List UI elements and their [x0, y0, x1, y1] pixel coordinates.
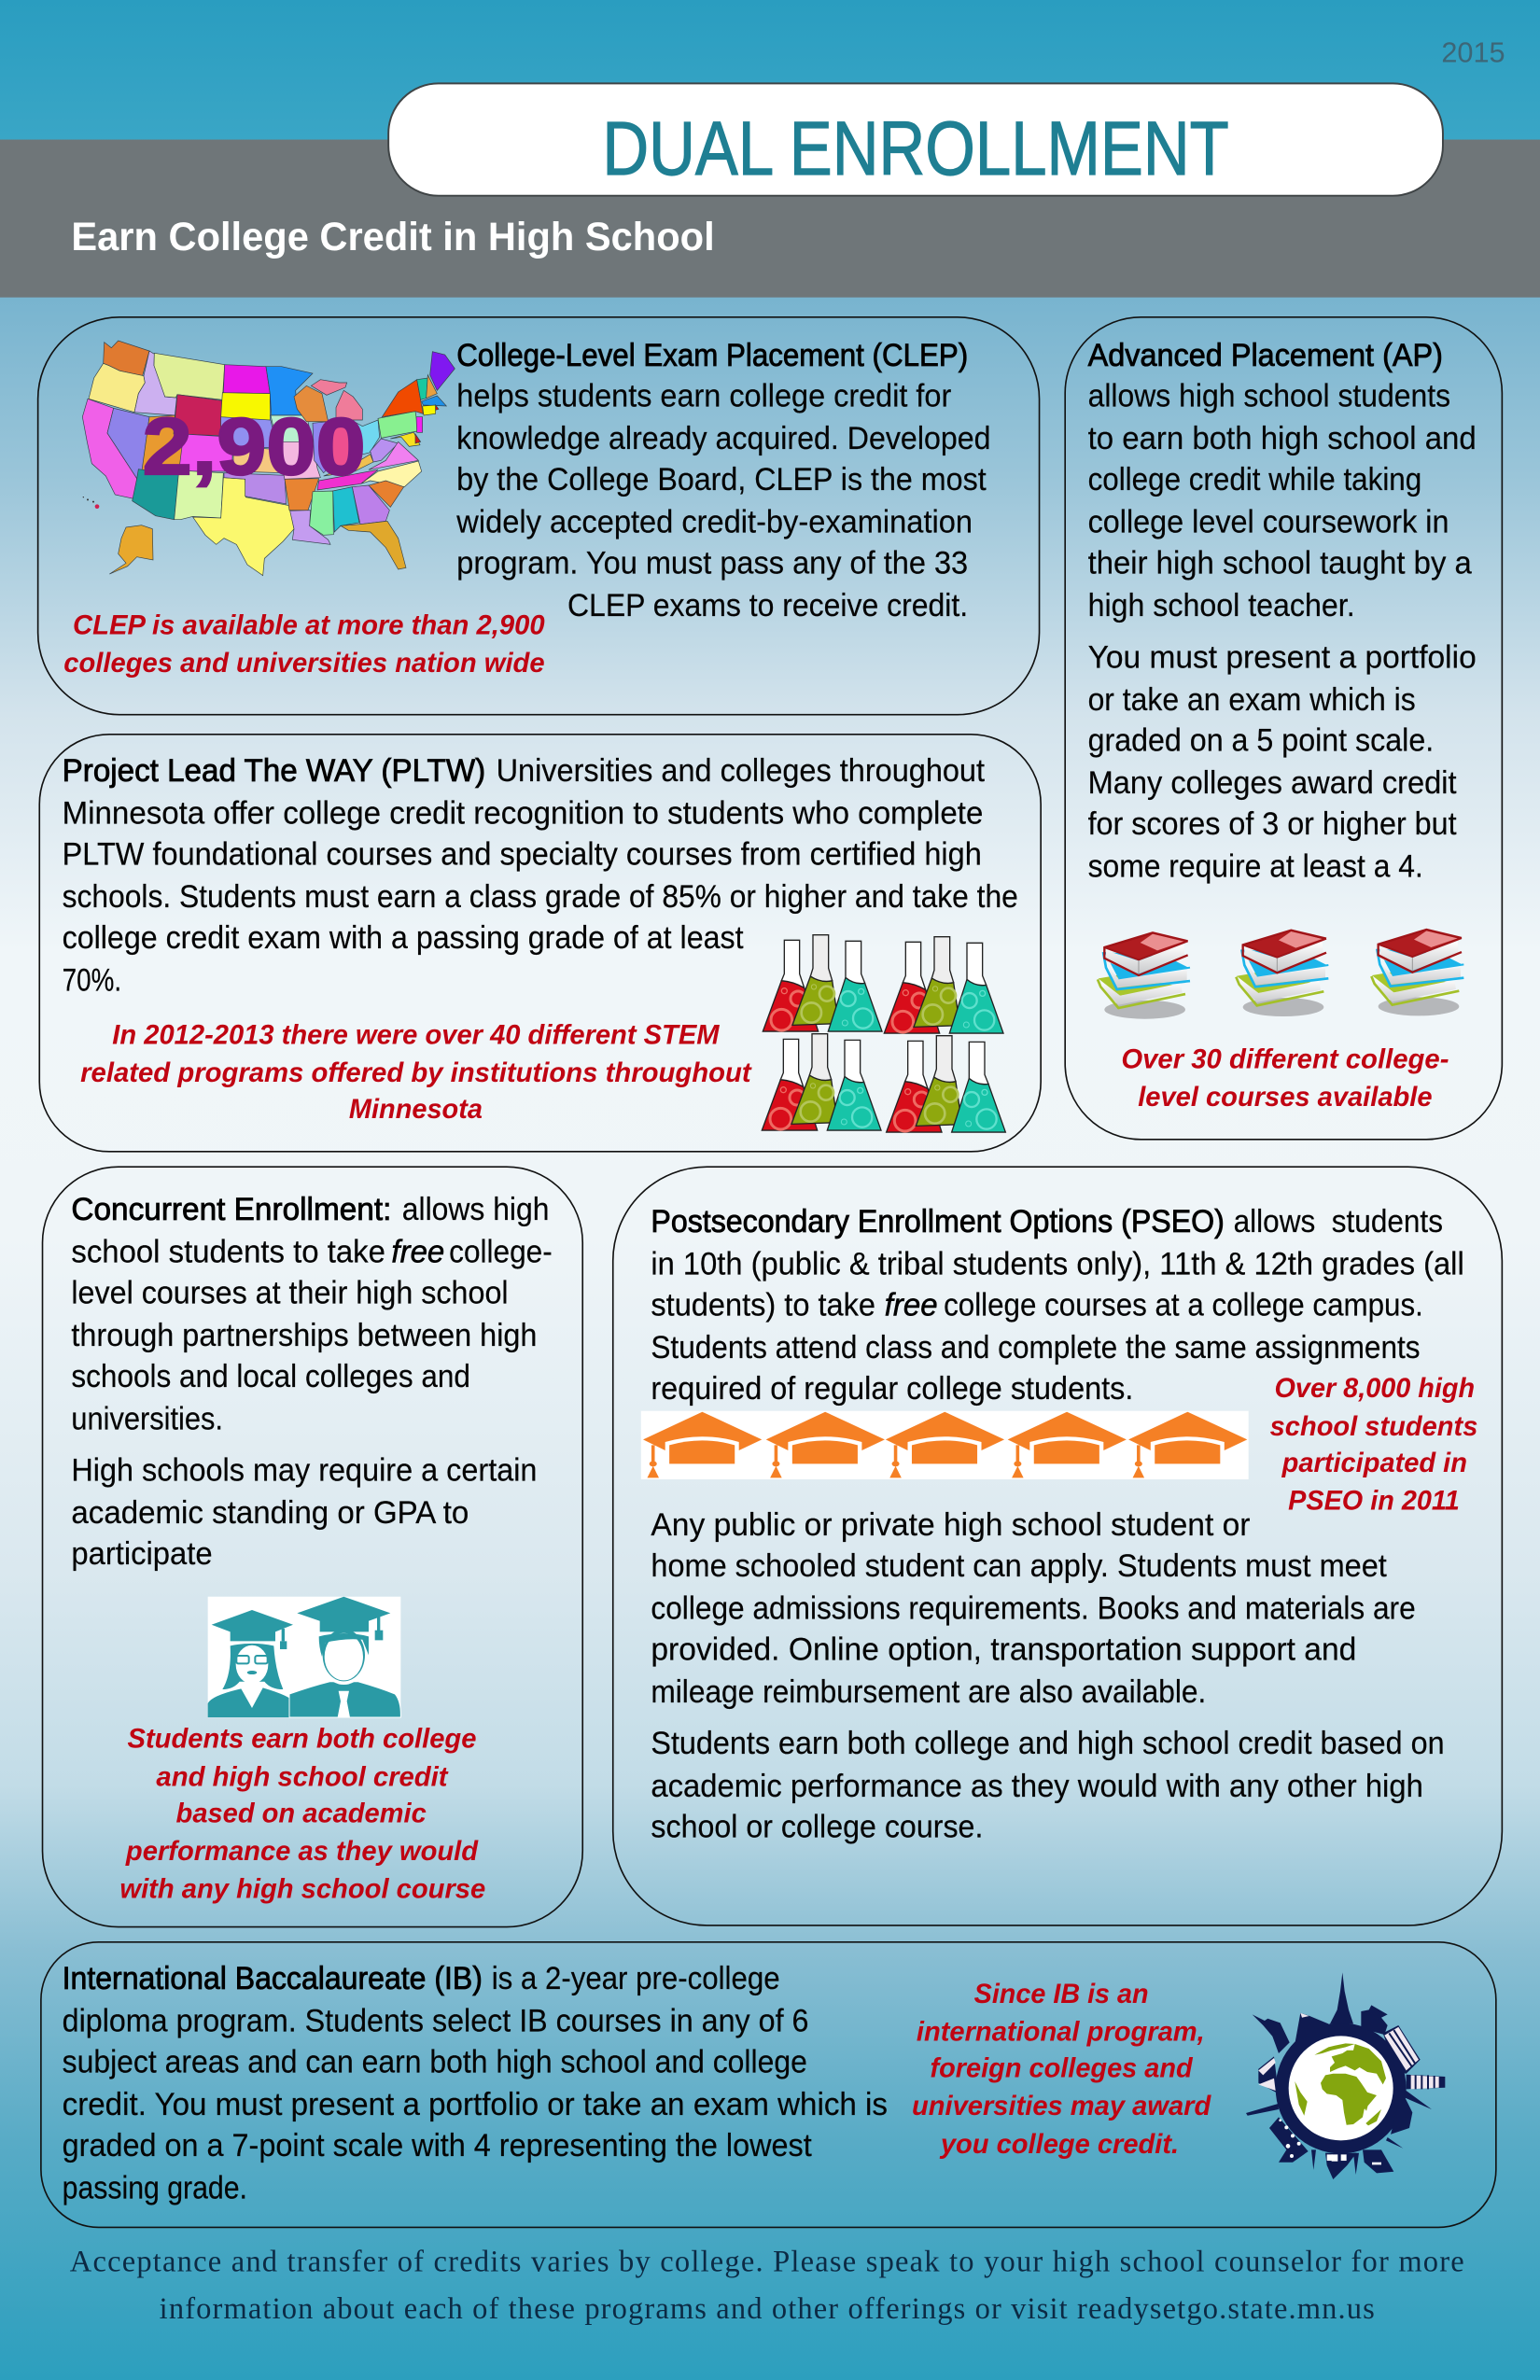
Concurrent text: High schools may require a certain: [71, 1453, 537, 1489]
Concurrent text: level courses at their high school: [71, 1275, 509, 1310]
icon: globe with landmarks: [1246, 1972, 1445, 2179]
year label: 2015: [1441, 36, 1505, 69]
header band: [0, 140, 1540, 298]
Concurrent callout: with any high school course: [119, 1875, 485, 1905]
icon: two graduates: [208, 1597, 400, 1717]
AP text: allows high school students: [1088, 379, 1450, 414]
PSEO details text: Any public or private high school student or: [651, 1507, 1251, 1543]
IB callout: international program,: [917, 2018, 1205, 2048]
IB text: credit. You must present a portfolio or take an exam which is: [63, 2087, 888, 2122]
PLTW callout: related programs offered by institutions throughout: [80, 1058, 752, 1088]
PLTW callout: [80, 1020, 752, 1125]
Concurrent text: academic standing or GPA to: [71, 1495, 469, 1531]
PLTW text: Minnesota offer college credit recognition to students who complete: [63, 796, 983, 832]
CLEP callout: [63, 611, 545, 679]
PSEO details text: school or college course.: [651, 1810, 983, 1845]
CLEP text: widely accepted credit-by-examination: [455, 505, 973, 540]
IB text: diploma program. Students select IB courses in any of 6: [63, 2004, 808, 2039]
PLTW callout: Minnesota: [349, 1095, 483, 1125]
big number 2,900: 2,900: [143, 402, 366, 492]
IB callout: universities may award: [912, 2092, 1211, 2121]
CLEP text: helps students earn college credit for: [456, 379, 951, 414]
AP text: [1088, 338, 1477, 885]
Concurrent text: [71, 1192, 553, 1572]
PSEO callout: Over 8,000 high: [1275, 1374, 1475, 1404]
Concurrent callout: Students earn both college: [128, 1725, 476, 1755]
IB text: graded on a 7-point scale with 4 representing the lowest: [63, 2128, 812, 2163]
AP text: some require at least a 4.: [1088, 849, 1423, 885]
AP callout: level courses available: [1138, 1083, 1433, 1113]
PLTW text: schools. Students must earn a class grade of 85% or higher and take the: [63, 879, 1018, 915]
Concurrent text: college-: [449, 1235, 553, 1270]
PSEO callout: PSEO in 2011: [1288, 1487, 1460, 1517]
PSEO details text: home schooled student can apply. Students must meet: [651, 1548, 1387, 1584]
IB callout: Since IB is an: [974, 1980, 1149, 2009]
footer note: information about each of these programs and other offerings or visit readysetgo.state.mn.us: [160, 2292, 1375, 2326]
AP text: college level coursework in: [1088, 505, 1449, 540]
Concurrent text: schools and local colleges and: [71, 1359, 470, 1394]
CLEP text: [455, 338, 991, 623]
PLTW callout: In 2012-2013 there were over 40 different STEM: [112, 1020, 720, 1050]
PSEO intro text: [651, 1204, 1464, 1407]
panel: PSEO: [613, 1167, 1502, 1925]
Concurrent text: through partnerships between high: [71, 1318, 537, 1353]
PSEO intro text: college courses at a college campus.: [944, 1287, 1423, 1323]
IB text: [63, 1961, 888, 2206]
PLTW text: 70%.: [63, 963, 121, 999]
AP text: college credit while taking: [1088, 462, 1421, 497]
PSEO details text: mileage reimbursement are also available.: [651, 1674, 1206, 1710]
AP text: Many colleges award credit: [1088, 765, 1457, 801]
Concurrent callout: [119, 1725, 485, 1905]
title: DUAL ENROLLMENT: [602, 106, 1229, 191]
PSEO details text: [651, 1507, 1445, 1845]
PLTW text: [63, 753, 1018, 999]
PLTW text: college credit exam with a passing grade of at least: [63, 920, 744, 956]
Concurrent callout: and high school credit: [156, 1762, 449, 1792]
PSEO intro text: required of regular college students.: [651, 1371, 1133, 1407]
Concurrent text: free: [391, 1235, 444, 1270]
IB callout: foreign colleges and: [931, 2054, 1194, 2084]
CLEP text: program. You must pass any of the 33: [456, 545, 968, 581]
PSEO intro text: Postsecondary Enrollment Options (PSEO): [651, 1204, 1225, 1239]
icon: row of graduation caps: [641, 1411, 1249, 1479]
panel: CLEP: [38, 317, 1040, 715]
AP text: to earn both high school and: [1088, 421, 1477, 456]
PSEO intro text: students) to take: [651, 1287, 875, 1323]
PLTW text: Project Lead The WAY (PLTW): [63, 753, 485, 789]
PSEO callout: school students: [1270, 1412, 1477, 1442]
Concurrent text: Concurrent Enrollment:: [71, 1192, 391, 1227]
icon: US map with 2,900: [82, 341, 455, 576]
IB text: is a 2-year pre-college: [492, 1961, 780, 1996]
AP text: high school teacher.: [1088, 588, 1355, 623]
AP callout: [1121, 1044, 1449, 1113]
AP text: for scores of 3 or higher but: [1088, 806, 1457, 842]
AP callout: Over 30 different college-: [1121, 1044, 1449, 1074]
subtitle: Earn College Credit in High School: [71, 215, 715, 259]
footer note: Acceptance and transfer of credits varies by college. Please speak to your high school counselor for more: [70, 2246, 1464, 2279]
Concurrent callout: performance as they would: [125, 1837, 479, 1867]
AP text: their high school taught by a: [1088, 545, 1472, 581]
Concurrent callout: based on academic: [176, 1799, 427, 1828]
IB callout: [912, 1980, 1211, 2160]
footer note: [70, 2246, 1464, 2326]
AP text: Advanced Placement (AP): [1088, 338, 1443, 373]
AP text: You must present a portfolio: [1088, 639, 1477, 675]
AP text: graded on a 5 point scale.: [1088, 723, 1434, 759]
PSEO callout: participated in: [1281, 1449, 1467, 1478]
PSEO details text: academic performance as they would with any other high: [651, 1769, 1423, 1804]
PSEO intro text: allows students: [1234, 1204, 1443, 1239]
panel: IB: [41, 1942, 1496, 2227]
Concurrent text: universities.: [71, 1401, 223, 1436]
panel: PLTW: [39, 735, 1041, 1152]
PSEO details text: Students earn both college and high school credit based on: [651, 1726, 1445, 1761]
CLEP text: knowledge already acquired. Developed: [456, 421, 991, 456]
CLEP text: CLEP exams to receive credit.: [567, 588, 968, 623]
IB text: passing grade.: [63, 2171, 247, 2206]
CLEP callout: CLEP is available at more than 2,900: [73, 611, 545, 641]
PLTW text: Universities and colleges throughout: [497, 753, 986, 789]
icon: chemistry flasks: [762, 935, 1005, 1132]
PSEO details text: college admissions requirements. Books and materials are: [651, 1591, 1416, 1627]
IB text: International Baccalaureate (IB): [63, 1961, 483, 1996]
title pill: [388, 83, 1443, 196]
PSEO intro text: free: [885, 1287, 938, 1323]
Concurrent text: allows high: [402, 1192, 549, 1227]
Concurrent text: participate: [71, 1536, 213, 1572]
CLEP callout: colleges and universities nation wide: [63, 649, 545, 679]
PLTW text: PLTW foundational courses and specialty courses from certified high: [63, 837, 982, 873]
CLEP text: College-Level Exam Placement (CLEP): [456, 338, 968, 373]
panel: Concurrent Enrollment: [43, 1167, 582, 1927]
Concurrent text: school students to take: [71, 1235, 385, 1270]
IB text: subject areas and can earn both high school and college: [63, 2045, 807, 2080]
IB callout: you college credit.: [939, 2130, 1179, 2160]
panel: AP: [1065, 317, 1502, 1140]
AP text: or take an exam which is: [1088, 682, 1416, 718]
PSEO details text: provided. Online option, transportation support and: [651, 1631, 1356, 1667]
PSEO callout: [1270, 1374, 1477, 1517]
PSEO intro text: in 10th (public & tribal students only), 11th & 12th grades (all: [651, 1247, 1464, 1282]
CLEP text: by the College Board, CLEP is the most: [456, 462, 987, 497]
icon: stacks of books: [1098, 930, 1463, 1019]
PSEO intro text: Students attend class and complete the same assignments: [651, 1330, 1421, 1365]
